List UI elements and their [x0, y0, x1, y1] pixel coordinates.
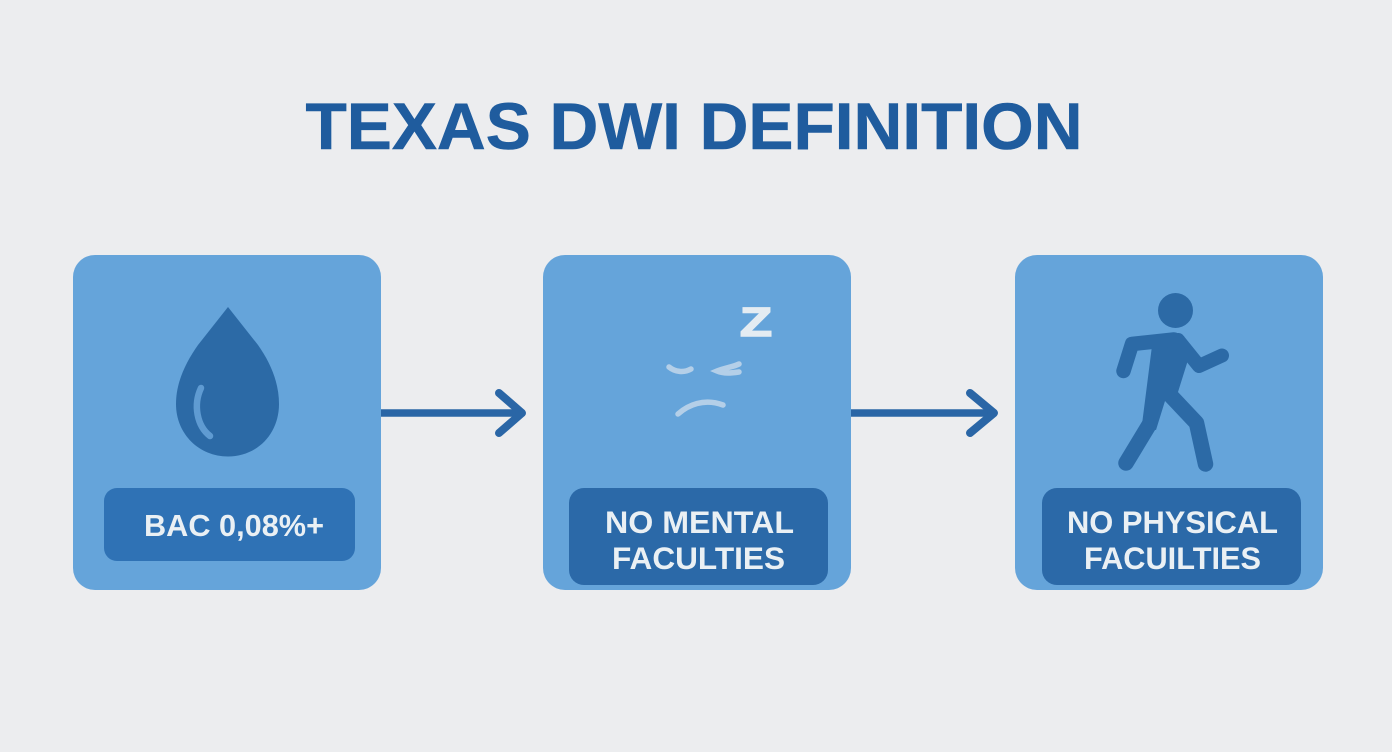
panel: BAC — [73, 255, 381, 590]
title: TEXAS DWI DEFINITION — [306, 89, 1082, 163]
panel background: mental — [543, 255, 851, 590]
label: BAC 0.08 — [104, 488, 355, 561]
label: no mental faculties: FACULTIES — [612, 540, 785, 576]
label: BAC 0.08: BAC 0,08%+ — [144, 508, 324, 543]
arrow: mental to physical — [851, 393, 994, 433]
panel: physical faculties — [1015, 255, 1323, 590]
icon: sleepy face: Z — [740, 299, 772, 345]
arrow: BAC to mental — [381, 393, 522, 433]
label: no physical faculties: NO PHYSICAL — [1067, 504, 1278, 540]
label: no mental faculties: NO MENTAL — [605, 504, 794, 540]
icon: sleepy face — [669, 299, 772, 414]
icon: walking person — [1124, 293, 1222, 464]
label: no mental faculties — [569, 488, 828, 585]
panel background: physical — [1015, 255, 1323, 590]
panel: mental faculties — [543, 255, 851, 590]
panel background: BAC — [73, 255, 381, 590]
icon: blood alcohol drop — [176, 307, 279, 456]
label: no physical faculties — [1042, 488, 1301, 585]
label: no physical faculties: FACUILTIES — [1084, 540, 1261, 576]
